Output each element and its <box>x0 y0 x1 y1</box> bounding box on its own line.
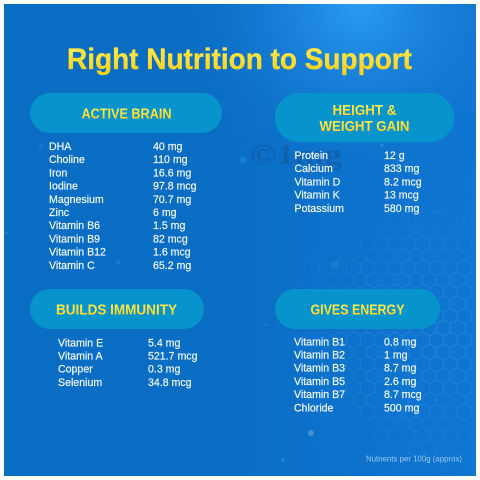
nutrient list: active brain: 110 mg <box>153 154 188 166</box>
nutrient list: height and weight gain: Vitamin K <box>294 190 340 202</box>
nutrient list: builds immunity: 34.8 mcg <box>148 377 192 389</box>
nutrient list: active brain: 16.6 mg <box>153 167 191 179</box>
nutrient list: active brain: 70.7 mg <box>153 194 191 206</box>
nutrient list: height and weight gain: 13 mcg <box>384 190 419 202</box>
nutrient list: gives energy: 8.7 mcg <box>384 389 422 401</box>
nutrient list: active brain: 65.2 mg <box>153 260 191 272</box>
nutrient list: gives energy: Vitamin B2 <box>294 350 345 362</box>
heading pill: height and weight gain: WEIGHT GAIN <box>320 119 410 135</box>
nutrient list: active brain: DHA <box>49 141 72 153</box>
nutrient list: height and weight gain <box>294 150 422 215</box>
nutrient list: builds immunity: Copper <box>58 364 93 376</box>
nutrient list: active brain: Vitamin B6 <box>49 220 100 232</box>
nutrient list: active brain: Vitamin C <box>49 260 95 272</box>
nutrient list: gives energy: 500 mg <box>384 402 419 414</box>
nutrient list: gives energy: Vitamin B1 <box>294 336 345 348</box>
watermark: 1mg: ©1mg <box>250 139 343 171</box>
nutrient list: builds immunity: 521.7 mcg <box>148 350 198 362</box>
heading pill: gives energy: GIVES ENERGY <box>310 302 405 318</box>
panel: active brain <box>30 93 222 272</box>
nutrient list: gives energy: Vitamin B5 <box>294 376 345 388</box>
nutrient list: active brain <box>49 141 197 272</box>
nutrient list: gives energy: 8.7 mg <box>384 363 416 375</box>
nutrient list: gives energy: 2.6 mg <box>384 376 416 388</box>
nutrient list: active brain: 6 mg <box>153 207 177 219</box>
nutrient list: height and weight gain: 12 g <box>384 150 405 162</box>
nutrient list: height and weight gain: Vitamin D <box>294 176 341 188</box>
nutrient list: builds immunity <box>58 337 198 389</box>
heading pill: height and weight gain <box>275 93 454 142</box>
heading pill: active brain: ACTIVE BRAIN <box>82 106 172 122</box>
panel: builds immunity <box>30 289 204 389</box>
title: Right Nutrition to Support <box>67 43 412 76</box>
nutrient list: height and weight gain: Calcium <box>294 163 333 175</box>
nutrient list: gives energy: 1 mg <box>384 350 408 362</box>
heading pill: builds immunity: BUILDS IMMUNITY <box>56 302 177 318</box>
nutrient list: gives energy <box>294 336 422 414</box>
nutrient list: builds immunity: Vitamin E <box>58 337 103 349</box>
nutrient list: height and weight gain: 833 mg <box>384 163 419 175</box>
nutrient list: active brain: 40 mg <box>153 141 183 153</box>
panel: gives energy <box>275 289 440 414</box>
nutrient list: gives energy: Vitamin B7 <box>294 389 345 401</box>
nutrient list: active brain: 82 mcg <box>153 233 188 245</box>
nutrient list: gives energy: Chloride <box>294 402 334 414</box>
heading pill: active brain <box>30 93 222 133</box>
nutrient list: height and weight gain: Potassium <box>294 203 344 215</box>
nutrient list: active brain: Choline <box>49 154 85 166</box>
nutrient list: height and weight gain: 580 mg <box>384 203 419 215</box>
nutrient list: active brain: Magnesium <box>49 194 104 206</box>
nutrient list: active brain: 1.6 mcg <box>153 247 191 259</box>
nutrient list: active brain: Vitamin B9 <box>49 233 100 245</box>
nutrient list: gives energy: 0.8 mg <box>384 336 416 348</box>
nutrient list: active brain: Vitamin B12 <box>49 247 106 259</box>
nutrient list: active brain: 97.8 mcg <box>153 181 197 193</box>
heading pill: height and weight gain: HEIGHT & <box>332 103 397 119</box>
nutrient list: builds immunity: 5.4 mg <box>148 337 180 349</box>
nutrient list: active brain: Iron <box>49 167 67 179</box>
nutrient list: builds immunity: Selenium <box>58 377 102 389</box>
nutrient list: builds immunity: Vitamin A <box>58 350 103 362</box>
nutrient list: height and weight gain: Protein <box>294 150 328 162</box>
heading pill: builds immunity <box>30 289 204 329</box>
nutrient list: builds immunity: 0.3 mg <box>148 364 180 376</box>
nutrient list: gives energy: Vitamin B3 <box>294 363 345 375</box>
panel: height and weight gain <box>275 93 454 215</box>
nutrient list: height and weight gain: 8.2 mcg <box>384 176 422 188</box>
nutrient list: active brain: Zinc <box>49 207 70 219</box>
footnote: Nutrients per 100g (approx) <box>366 454 462 464</box>
nutrient list: active brain: Iodine <box>49 181 78 193</box>
heading pill: gives energy <box>275 289 440 329</box>
nutrient list: active brain: 1.5 mg <box>153 220 185 232</box>
